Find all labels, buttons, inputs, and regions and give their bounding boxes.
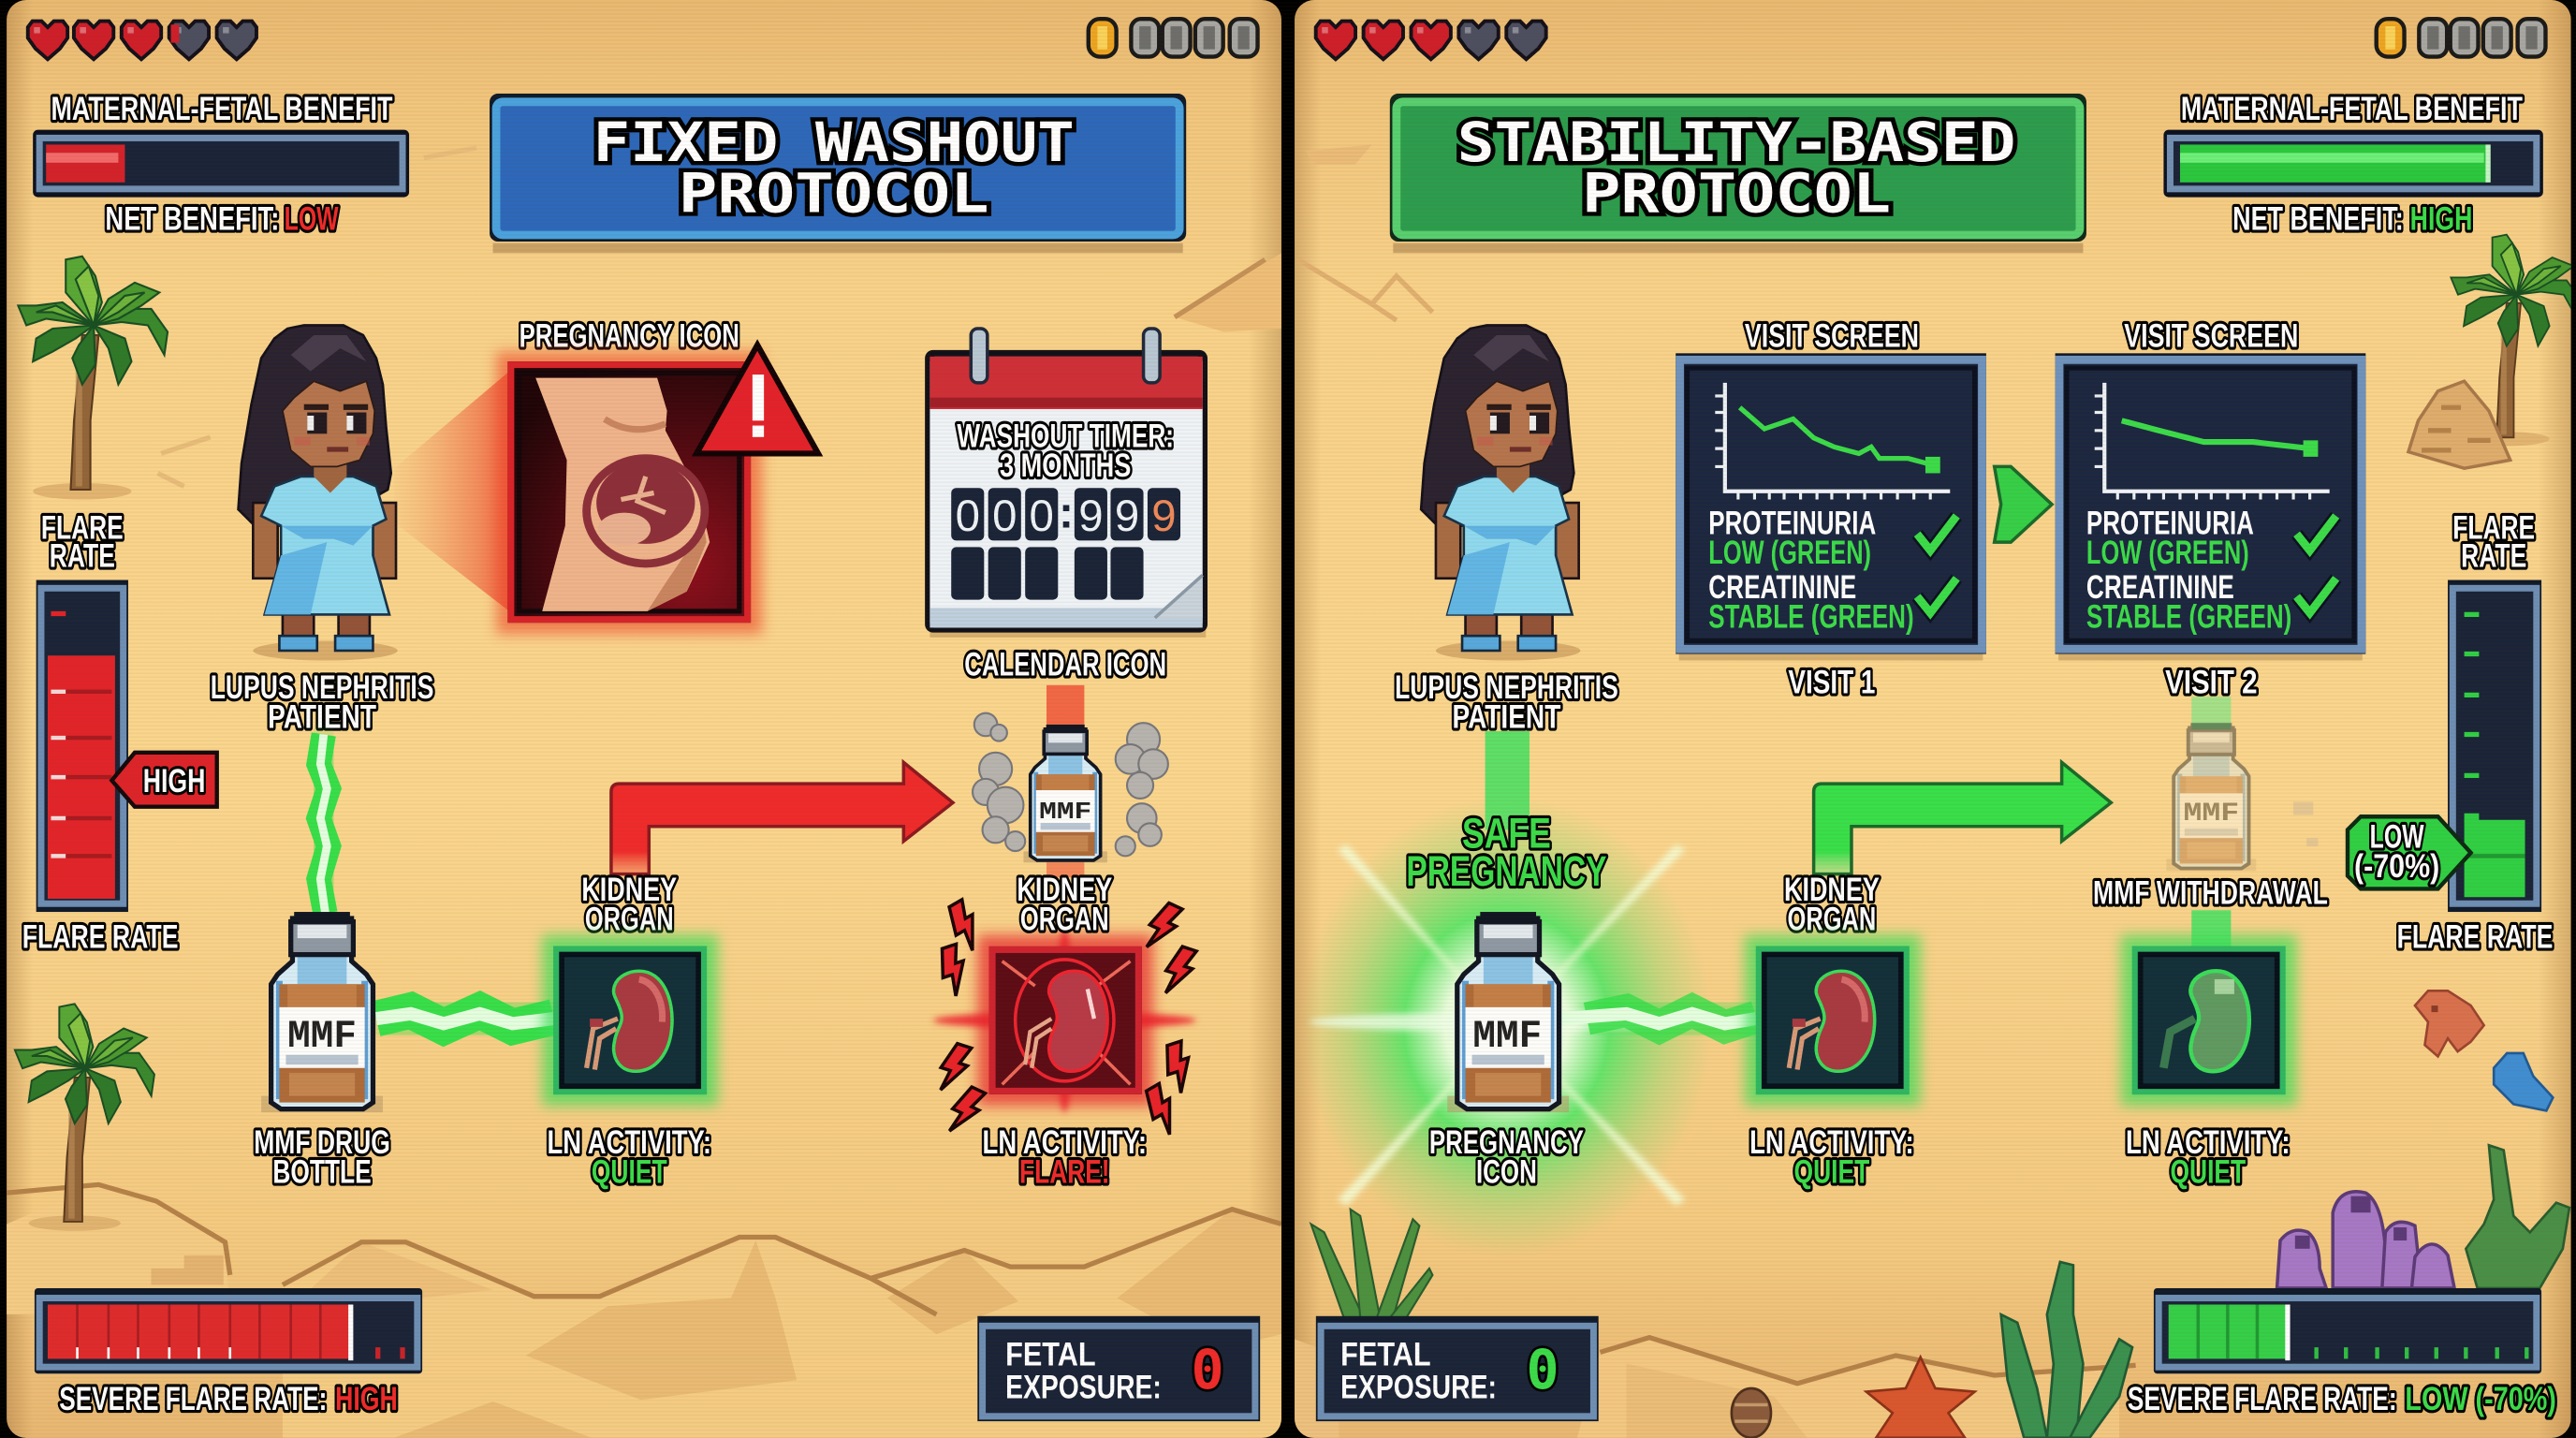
pregnancy icon label right — [1429, 1124, 1584, 1191]
severe flare text right: SEVERE FLARE RATE: — [2128, 1381, 2397, 1417]
timer text: WASHOUT TIMER: — [957, 418, 1174, 454]
title: fixed washout protocol: PROTOCOL — [679, 161, 989, 225]
lightning bolts — [934, 899, 1198, 1138]
womb and fetus — [587, 459, 705, 564]
visit screen 2 — [2056, 317, 2365, 661]
dust specks — [2293, 801, 2318, 846]
visit screen label 1: VISIT SCREEN — [1745, 317, 1919, 354]
mmf drug bottle — [261, 912, 383, 1112]
fetal exposure left: FETAL — [1005, 1336, 1096, 1372]
shell — [1732, 1388, 1771, 1438]
flare rate label: FLARE — [41, 510, 124, 547]
faded mmf bottle: MMF — [2183, 800, 2239, 829]
severe flare text left: SEVERE FLARE RATE: — [59, 1381, 327, 1417]
patient label right: PATIENT — [1453, 698, 1561, 735]
title: stability-based protocol: STABILITY-BASED — [1457, 110, 2015, 174]
net benefit right: NET BENEFIT: — [2232, 201, 2404, 238]
visit 2 label: VISIT 2 — [2165, 665, 2257, 701]
beam: bottle to kidney right — [1560, 1010, 1756, 1027]
lN activity right b: QUIET — [2170, 1154, 2247, 1191]
lN activity left: LN ACTIVITY: — [547, 1124, 711, 1161]
pregnancy icon panel — [496, 317, 818, 634]
red cone from patient to pregnancy — [394, 372, 509, 611]
red zero: 0 — [1191, 1338, 1224, 1401]
visit screen 1: CREATININE — [1708, 569, 1856, 606]
timer text: 3 MONTHS — [1000, 448, 1131, 484]
lN activity right b: LN ACTIVITY: — [2126, 1124, 2291, 1161]
kidney label left b — [1017, 872, 1112, 937]
patient label right: LUPUS NEPHRITIS — [1395, 669, 1618, 706]
title: fixed washout protocol — [490, 94, 1186, 253]
benefit meter right — [2163, 91, 2543, 238]
visit screen 2: PROTEINURIA — [2086, 505, 2254, 541]
lN activity flare: LN ACTIVITY: — [983, 1124, 1147, 1161]
fetal exposure right: EXPOSURE: — [1340, 1370, 1497, 1406]
title: stability-based protocol: PROTOCOL — [1582, 161, 1891, 225]
kidney label right: ORGAN — [1788, 901, 1876, 937]
patient label right — [1395, 669, 1618, 735]
kidney quiet box right — [1745, 935, 1921, 1106]
net benefit left: NET BENEFIT: — [105, 201, 279, 238]
safe pregnancy text: SAFE — [1462, 810, 1551, 858]
calendar label: CALENDAR ICON — [964, 646, 1166, 682]
bottle label — [254, 1124, 390, 1191]
safe pregnancy text: PREGNANCY — [1406, 847, 1606, 895]
seaweed centre — [2001, 1262, 2132, 1438]
green seaweed right — [2466, 1145, 2569, 1288]
calendar icon — [925, 329, 1208, 638]
hearts left — [28, 22, 256, 59]
pregnancy icon label right: PREGNANCY — [1429, 1124, 1584, 1161]
coins right — [2377, 19, 2545, 57]
palm tree bottom left — [15, 1004, 154, 1231]
kidney calm box green — [2121, 935, 2297, 1106]
faded mmf bottle — [2166, 723, 2256, 871]
palm tree top left — [18, 257, 168, 500]
benefit label left: MATERNAL-FETAL BENEFIT — [51, 91, 393, 127]
visit 1 label: VISIT 1 — [1788, 665, 1875, 701]
kidney label right — [1784, 872, 1880, 937]
high tag: HIGH — [143, 763, 205, 800]
fading mmf bottle left: MMF — [1039, 798, 1091, 826]
coins left — [1089, 19, 1258, 57]
divider and scanlines overlay — [1281, 0, 1295, 1438]
beam: patient to bottle — [319, 734, 329, 914]
severe flare text left: HIGH — [335, 1381, 398, 1417]
blue creature — [2494, 1053, 2553, 1110]
visit screen 2: LOW (GREEN) — [2086, 535, 2249, 571]
kidney label right: KIDNEY — [1784, 872, 1880, 908]
mmf bottle right: MMF — [1472, 1014, 1542, 1059]
severe flare meter left — [35, 1288, 422, 1417]
panel: fixed washout background — [7, 0, 1281, 1438]
timer digits: 0 — [956, 492, 980, 541]
connector: bottle to flare — [1046, 861, 1084, 877]
seaweed left — [1311, 1210, 1432, 1318]
net benefit right: HIGH — [2410, 201, 2472, 238]
green zero: 0 — [1526, 1338, 1559, 1401]
fading mmf bottle left — [1023, 725, 1107, 862]
palm tree top right — [2451, 235, 2576, 446]
kidney flare box — [933, 899, 1198, 1138]
low tag: LOW — [2370, 819, 2424, 856]
safe pregnancy text — [1406, 810, 1606, 895]
timer text — [957, 418, 1174, 484]
timer digits: 9 — [1115, 492, 1139, 541]
low tag — [2348, 816, 2471, 888]
severe flare meter right — [2128, 1288, 2556, 1417]
timer digits: : — [1059, 488, 1074, 537]
lN activity right a — [1749, 1124, 1914, 1191]
visit screen 2: CREATININE — [2086, 569, 2234, 606]
arrow between visits — [1995, 466, 2052, 542]
lN activity flare: FLARE! — [1019, 1154, 1110, 1191]
octopus — [2415, 990, 2484, 1056]
title: stability-based protocol — [1390, 94, 2086, 253]
benefit meter left — [33, 91, 409, 238]
patient right — [1395, 325, 1618, 735]
starfish — [1866, 1357, 1975, 1438]
connector: patient down right — [1486, 731, 1530, 829]
connector: calendar to bottle — [1046, 685, 1084, 731]
bottle label: BOTTLE — [272, 1154, 372, 1191]
patient label left — [211, 669, 433, 735]
kidney label left a: ORGAN — [585, 901, 674, 937]
timer digits — [951, 488, 1180, 600]
lN activity flare — [983, 1124, 1147, 1191]
visit screen 1: STABLE (GREEN) — [1708, 598, 1914, 635]
purple coral — [2277, 1192, 2454, 1288]
rock — [2408, 381, 2510, 468]
lN activity left: QUIET — [592, 1154, 667, 1191]
patient left — [211, 325, 433, 735]
flare rate gauge right: RATE — [2461, 537, 2526, 574]
kidney label left b: ORGAN — [1020, 901, 1109, 937]
timer digits: 0 — [1030, 492, 1054, 541]
lN activity right b — [2126, 1124, 2291, 1191]
flare rate gauge left: RATE — [50, 537, 115, 574]
flare rate label: FLARE — [2452, 510, 2535, 547]
beam: bottle to kidney — [376, 1010, 554, 1027]
belly — [535, 378, 710, 611]
timer digits: 9 — [1151, 492, 1177, 541]
fetal exposure right: FETAL — [1340, 1336, 1431, 1372]
visit screen 1: PROTEINURIA — [1708, 505, 1876, 541]
flare rate bottom label: FLARE RATE — [22, 919, 178, 956]
mmf withdrawal label: MMF WITHDRAWAL — [2093, 874, 2328, 911]
warning triangle — [696, 345, 818, 453]
lN activity left — [547, 1124, 711, 1191]
lN activity right a: QUIET — [1794, 1154, 1870, 1191]
red elbow arrow — [611, 762, 953, 874]
connector: visit 2 to bottle — [2191, 697, 2231, 729]
timer digits: 9 — [1078, 492, 1104, 541]
kidney label left a: KIDNEY — [581, 872, 677, 908]
connector: withdrawal to kidney — [2191, 910, 2231, 949]
flare rate gauge left — [22, 510, 217, 956]
low tag: (-70%) — [2354, 848, 2439, 885]
kidney quiet box left — [542, 935, 718, 1106]
green elbow arrow — [1814, 762, 2111, 874]
patient label left: LUPUS NEPHRITIS — [211, 669, 433, 706]
bottle label: MMF DRUG — [254, 1124, 390, 1161]
flare rate gauge right — [2348, 510, 2553, 956]
safe pregnancy glow — [1301, 797, 1712, 1257]
fetal exposure right — [1316, 1316, 1599, 1421]
net benefit left: LOW — [285, 201, 339, 238]
visit screen 1 — [1676, 317, 1986, 661]
pregnancy label: PREGNANCY ICON — [520, 317, 739, 354]
visit screen label 2: VISIT SCREEN — [2124, 317, 2298, 354]
patient label left: PATIENT — [268, 698, 376, 735]
panel: stability-based background — [1295, 0, 2571, 1438]
high tag — [111, 753, 217, 807]
fetal exposure left: EXPOSURE: — [1005, 1370, 1162, 1406]
mmf drug bottle: MMF — [287, 1014, 357, 1059]
timer digits: 0 — [992, 492, 1017, 541]
visit screen 1: LOW (GREEN) — [1708, 535, 1871, 571]
visit screen 2: STABLE (GREEN) — [2086, 598, 2291, 635]
smoke puffs — [973, 713, 1168, 856]
mmf bottle right — [1447, 912, 1569, 1112]
title: fixed washout protocol: FIXED WASHOUT — [593, 110, 1075, 174]
fetal exposure left — [977, 1316, 1260, 1421]
hearts right — [1316, 22, 1546, 59]
lN activity right a: LN ACTIVITY: — [1749, 1124, 1914, 1161]
kidney label left a — [581, 872, 677, 937]
kidney label left b: KIDNEY — [1017, 872, 1112, 908]
pregnancy icon label right: ICON — [1476, 1154, 1537, 1191]
